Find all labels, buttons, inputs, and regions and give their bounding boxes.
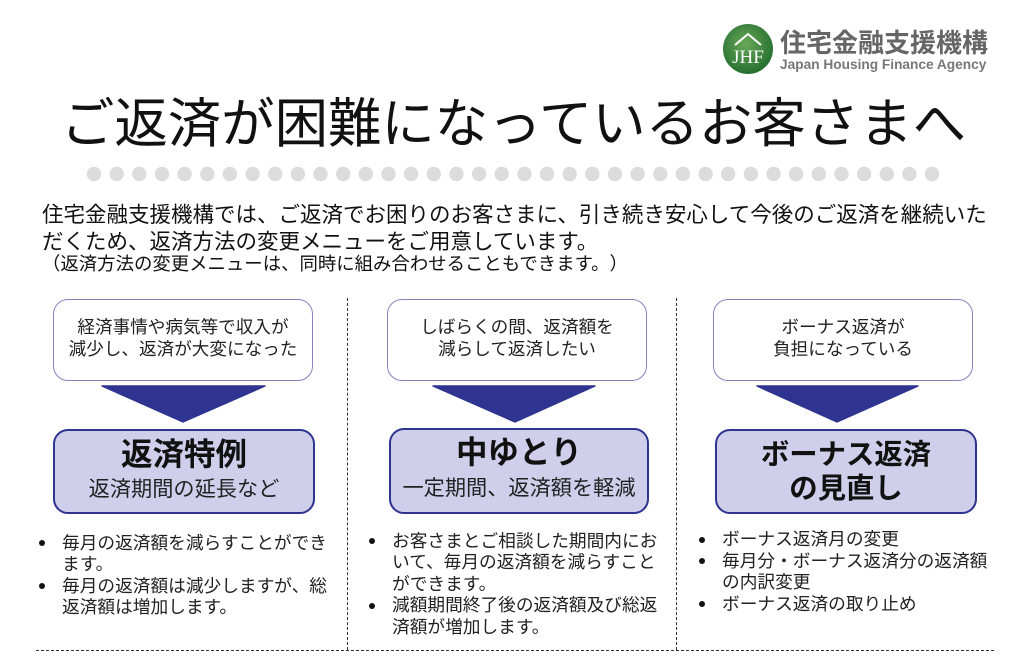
logo Japanese name: 住宅金融支援機構	[780, 28, 988, 58]
bullets 1: 毎月の返済額を減らすことができ	[62, 532, 327, 552]
solution box 3: ボーナス返済	[761, 439, 931, 471]
bullets 3: ボーナス返済の取り止め	[722, 594, 917, 614]
bullets 3: の内訳変更	[722, 572, 810, 592]
bullets 1	[39, 532, 327, 617]
solution box 2: 一定期間、返済額を軽減	[402, 477, 636, 500]
arrow 3	[756, 385, 919, 423]
column dividers	[347, 298, 348, 650]
solution box 1: 返済特例	[121, 436, 247, 472]
bullets 2: 済額が増加します。	[392, 617, 549, 637]
logo emblem	[723, 24, 773, 74]
solution box 1: 返済期間の延長など	[89, 478, 279, 501]
panel: column 1	[39, 299, 327, 617]
bullets 2	[369, 530, 657, 637]
situation box 2: しばらくの間、返済額を	[420, 317, 614, 337]
situation box 3: 負担になっている	[773, 339, 913, 359]
bullets 1: 毎月の返済額は減少しますが、総	[62, 576, 327, 596]
solution box 3	[715, 429, 977, 514]
intro text: （返済方法の変更メニューは、同時に組み合わせることもできます。）	[42, 253, 628, 274]
situation box 3	[713, 299, 973, 381]
logo English name: Japan Housing Finance Agency	[780, 57, 986, 72]
bullets 2: お客さまとご相談した期間内にお	[392, 530, 657, 550]
intro text: だくため、返済方法の変更メニューをご用意しています。	[42, 230, 598, 254]
situation box 1: 減少し、返済が大変になった	[69, 339, 297, 359]
solution box 3: の見直し	[789, 473, 903, 505]
panel: column 2	[369, 299, 657, 637]
intro text: 住宅金融支援機構では、ご返済でお困りのお客さまに、引き続き安心して今後のご返済を継続いた	[42, 203, 987, 227]
logo emblem: JHF	[732, 47, 764, 68]
arrow 1	[101, 385, 266, 423]
bullets 2: いて、毎月の返済額を減らすこと	[392, 552, 656, 572]
title: ご返済が困難になっているお客さまへ	[61, 95, 966, 154]
situation box 2: 減らして返済したい	[438, 339, 596, 359]
intro text	[42, 203, 987, 274]
bullets 2: 減額期間終了後の返済額及び総返	[392, 595, 657, 615]
bullets 2: ができます。	[392, 574, 496, 594]
panel: column 3	[699, 299, 987, 614]
bullets 1: 返済額は増加します。	[62, 597, 237, 617]
arrow 2	[432, 385, 596, 423]
bullets 3	[699, 529, 987, 614]
bullets 1: ます。	[62, 554, 113, 574]
situation box 1: 経済事情や病気等で収入が	[77, 317, 289, 337]
situation box 2	[387, 299, 647, 381]
solution box 2	[389, 428, 649, 514]
solution box 1	[53, 429, 315, 514]
bullets 3: 毎月分・ボーナス返済分の返済額	[722, 551, 987, 571]
situation box 3: ボーナス返済が	[781, 317, 905, 337]
situation box 1	[53, 299, 313, 381]
solution box 2: 中ゆとり	[456, 434, 582, 470]
logo: Japan Housing Finance Agency	[723, 24, 988, 74]
bullets 3: ボーナス返済月の変更	[722, 529, 899, 549]
dotted divider	[86, 166, 940, 182]
